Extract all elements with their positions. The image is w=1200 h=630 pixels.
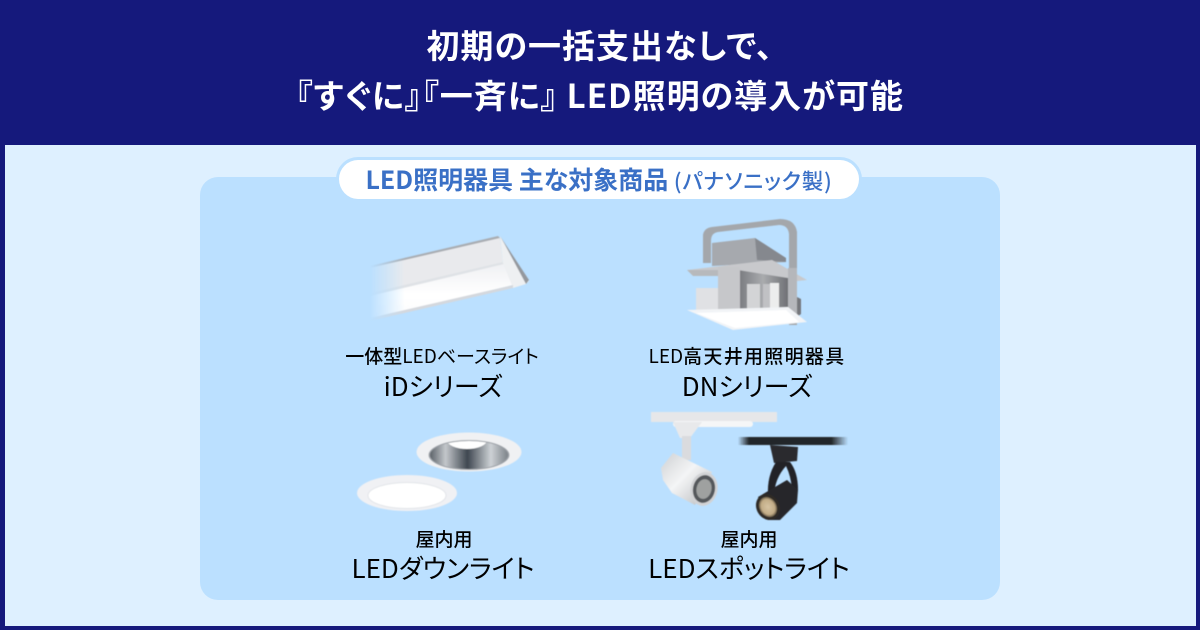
title: [296, 20, 904, 118]
heading pill: LED照明器具 主な対象商品 (パナソニック製): [365, 161, 833, 197]
panel: target products: [200, 177, 1000, 600]
text: downlight name: LEDダウンライト: [351, 549, 535, 586]
text: spotlight label: 屋内用: [720, 525, 778, 552]
text: iD series name: iDシリーズ: [384, 367, 502, 404]
text: spotlight name: LEDスポットライト: [648, 549, 850, 586]
icon: downlights: [356, 432, 522, 512]
text: DN series name: DNシリーズ: [682, 367, 812, 404]
text: downlight label: 屋内用: [415, 525, 473, 552]
text: iD series label: 一体型LEDベースライト: [345, 342, 539, 369]
icon: base light: [374, 236, 530, 318]
text: DN series label: LED高天井用照明器具: [648, 342, 846, 369]
icon: high bay light: [687, 218, 807, 330]
light background panel: [5, 145, 1196, 626]
icon: spotlights: [650, 412, 848, 521]
title: 『すぐに』『一斉に』 LED照明の導入が可能: [296, 70, 904, 118]
title: 初期の一括支出なしで、: [427, 20, 773, 68]
